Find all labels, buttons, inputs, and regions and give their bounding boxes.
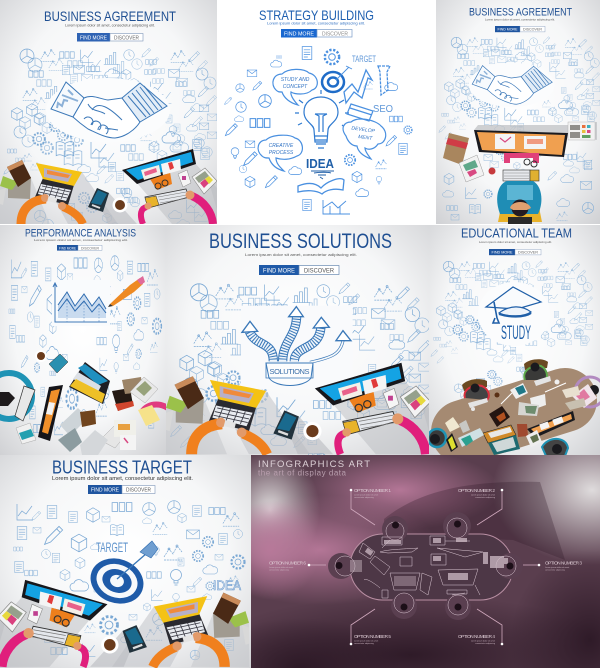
subtitle: Lorem ipsum dolor sit amet, consectetur adipiscing elit.: [34, 238, 128, 242]
subtitle: Lorem ipsum dolor sit amet, consectetur adipiscing elit.: [52, 476, 193, 482]
doodle field: [4, 48, 217, 232]
monitor shadow: [474, 122, 597, 140]
icon: tie: [378, 66, 390, 95]
subtitle: Lorem ipsum dolor sit amet, consectetur adipiscing elit.: [245, 252, 357, 257]
box: [443, 133, 469, 165]
buttons: [259, 265, 339, 275]
icon: pencil: [108, 276, 145, 307]
cloud: develop ment: [343, 119, 386, 159]
doodle field: [431, 261, 593, 400]
pink arm: [142, 404, 172, 412]
option 3: Lorem ipsum dolor sit amet: [545, 566, 570, 569]
buttons: FIND MORE: [80, 35, 108, 41]
icon: credit card: [347, 104, 373, 121]
option 2: OPTION NUMBER 2: [458, 488, 495, 493]
option 5: [350, 609, 391, 645]
idea word: [306, 157, 334, 179]
solutions box: [266, 363, 313, 386]
buttons: FIND MORE: [498, 27, 518, 32]
icon: light bulb: [295, 90, 349, 148]
cloud: study and concept: [273, 69, 317, 105]
option 5: Lorem ipsum dolor sit amet: [354, 640, 379, 642]
option 3: consectetur adipiscing: [545, 568, 565, 572]
heading: BUSINESS TARGET: [52, 458, 192, 478]
buttons: DISCOVER: [304, 268, 334, 274]
person lower right: [542, 439, 568, 456]
cloud: study and concept: CONCEPT: [283, 84, 308, 90]
heading: PERFORMANCE ANALYSIS: [25, 228, 136, 240]
panel: educational team: STUDY: [501, 323, 531, 344]
buttons: [88, 485, 155, 494]
option 5: OPTION NUMBER 5: [354, 634, 391, 639]
panel: business solutions: [166, 225, 431, 507]
desk scene mirrored: [0, 580, 249, 667]
panel: performance analysis: [0, 225, 172, 455]
option 4: Lorem ipsum dolor sit amet: [471, 640, 495, 642]
panel: business agreement 2: [436, 0, 600, 224]
doodle field: [171, 283, 430, 507]
buttons: DISCOVER: [126, 488, 151, 494]
monitor stand: [504, 153, 539, 163]
table light blocks: [350, 538, 508, 586]
cloud: creative process: [258, 135, 302, 171]
person top: [524, 359, 551, 386]
tagline: the art of display data: [258, 468, 347, 478]
heading: BUSINESS SOLUTIONS: [209, 230, 392, 253]
buttons: FIND MORE: [91, 488, 119, 494]
table shadow band: [384, 482, 565, 560]
option 4: consectetur adipiscing: [475, 642, 495, 645]
title: INFOGRAPHICS ART: [258, 459, 370, 470]
heading: STRATEGY BUILDING: [259, 7, 374, 23]
option 4: OPTION NUMBER 4: [458, 634, 495, 639]
option 1: [350, 488, 391, 525]
coffee: [37, 352, 47, 360]
option 6: [269, 560, 326, 572]
buttons: [57, 245, 102, 251]
subtitle: Lorem ipsum dolor sit amet, consectetur adipiscing elit.: [485, 18, 555, 22]
seated person: [497, 181, 542, 224]
cloud: develop ment: MENT: [358, 134, 374, 142]
option 2: Lorem ipsum dolor sit amet: [471, 494, 495, 496]
option 1: OPTION NUMBER 1: [354, 488, 391, 493]
target word: TARGET: [352, 54, 376, 64]
small icons: [224, 47, 412, 211]
glasses: [524, 159, 537, 167]
buttons: DISCOVER: [518, 250, 538, 255]
option 3: OPTION NUMBER 3: [545, 560, 582, 566]
cloud: creative process: CREATIVE: [269, 143, 294, 149]
document left: [459, 155, 484, 182]
option 6: OPTION NUMBER 6: [269, 560, 306, 566]
heading: BUSINESS AGREEMENT: [44, 8, 176, 24]
person right: [575, 377, 600, 407]
seo label: SEO: [373, 104, 393, 115]
desk scene with laptop and monitor: [0, 149, 217, 224]
target word: TARGET: [96, 539, 128, 555]
solutions box: SOLUTIONS: [270, 367, 310, 376]
person left: [462, 379, 489, 408]
doodle field: [439, 37, 600, 176]
option 5: consectetur adipiscing: [354, 642, 374, 645]
laptop: [69, 362, 110, 404]
option 4: [458, 609, 503, 645]
panel: educational team: [428, 225, 600, 456]
person teal arc: [0, 373, 32, 419]
monitor: [474, 130, 568, 157]
subtitle: Lorem ipsum dolor sit amet, consectetur adipiscing elit.: [65, 24, 155, 28]
cloud: develop ment: DEVELOP: [351, 125, 376, 135]
heads: [336, 520, 514, 610]
table outline: [350, 534, 513, 600]
idea word: IDEA: [306, 157, 334, 171]
buttons: FIND MORE: [492, 250, 513, 255]
option 1: Lorem ipsum dolor sit amet: [354, 494, 379, 496]
subtitle: Lorem ipsum dolor sit amet, consectetur adipiscing elit.: [479, 240, 552, 244]
phone: [49, 354, 68, 373]
chart sheet right: [568, 122, 595, 140]
buttons: [495, 26, 545, 32]
keyboard: [503, 170, 539, 181]
book: [112, 388, 134, 411]
cloud: study and concept: STUDY AND: [281, 77, 310, 83]
table items: [335, 518, 516, 615]
option 2: consectetur adipiscing: [475, 496, 495, 499]
panel: business agreement 1: [0, 0, 217, 232]
people chairs: [328, 512, 523, 620]
buttons: DISCOVER: [523, 27, 542, 32]
cloud: creative process: PROCESS: [269, 150, 294, 156]
option 6: consectetur adipiscing: [269, 568, 289, 572]
doodle field: [9, 256, 161, 439]
handshake sketch: [46, 78, 170, 142]
panel: business target: [0, 455, 251, 668]
doodle field: [14, 501, 244, 660]
bullseye with arrow: [84, 541, 158, 611]
heading: BUSINESS AGREEMENT: [469, 6, 572, 18]
person lower left: [428, 429, 446, 447]
buttons: DISCOVER: [114, 35, 139, 41]
idea doodles: [224, 47, 412, 214]
panel: strategy building: [217, 0, 435, 224]
icon: target: [322, 66, 352, 92]
arrows sketch: [241, 306, 353, 389]
lower doodles: [443, 154, 594, 221]
icon: open book: [298, 179, 344, 194]
cap backdrop: [478, 282, 550, 346]
tablet monitor: [38, 385, 63, 441]
brown sheet stack: [122, 377, 158, 403]
buttons: [77, 33, 143, 42]
idea word: IDEA: [213, 577, 242, 593]
buttons: DISCOVER: [81, 246, 99, 250]
panel: infographics art dark: [251, 455, 600, 668]
buttons: [489, 249, 541, 255]
buttons: DISCOVER: [322, 32, 348, 38]
table items: [445, 380, 597, 455]
buttons: FIND MORE: [59, 246, 76, 250]
subtitle: Lorem ipsum dolor sit amet, consectetur adipiscing elit.: [267, 22, 365, 26]
option 1: consectetur adipiscing: [354, 496, 374, 499]
option 2: [458, 488, 503, 525]
mouse: [488, 168, 496, 174]
handshake sketch: [469, 63, 554, 107]
icon: bottom chart: [323, 200, 350, 214]
graduation cap sketch: [486, 287, 541, 323]
oval table: [463, 400, 565, 432]
line chart sketch: [52, 280, 110, 326]
desk scene with laptop and monitor: [166, 363, 431, 454]
bottom items: [16, 405, 160, 455]
option 3: [523, 560, 582, 572]
buttons: FIND MORE: [284, 32, 314, 38]
buttons: FIND MORE: [263, 268, 296, 274]
buttons: [281, 29, 352, 38]
heading: EDUCATIONAL TEAM: [461, 226, 572, 240]
option 6: Lorem ipsum dolor sit amet: [269, 566, 294, 569]
keyboard tilted: [15, 386, 35, 421]
icon: rising chart arrow: [344, 70, 372, 103]
